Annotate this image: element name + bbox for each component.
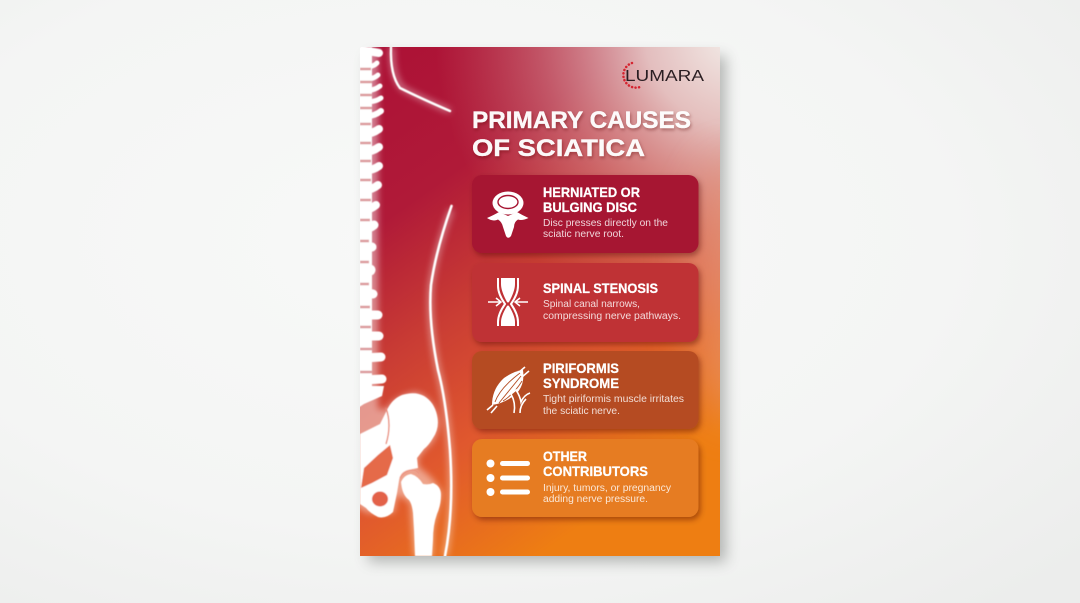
vertebral column <box>360 47 373 387</box>
card: piriformis syndrome: SYNDROME <box>543 375 619 391</box>
card: piriformis syndrome <box>472 351 698 429</box>
skeleton illustration <box>350 47 452 556</box>
spine <box>356 47 382 392</box>
title: OF SCIATICA <box>472 135 645 162</box>
card description: Tight piriformis muscle irritates <box>543 394 684 405</box>
back contour <box>430 206 452 556</box>
poster gradient background <box>360 47 720 556</box>
card heading: OTHER <box>543 448 587 464</box>
title: PRIMARY CAUSES <box>472 107 691 134</box>
icon: vertebra with disc <box>487 192 528 238</box>
card heading: PIRIFORMIS <box>543 360 619 376</box>
icon: narrowed spinal canal <box>488 278 528 326</box>
joint line <box>386 408 389 444</box>
card heading: SPINAL STENOSIS <box>543 280 658 296</box>
card: herniated or bulging disc: sciatic nerve root. <box>543 229 624 240</box>
card background <box>472 351 698 429</box>
poster <box>360 47 720 556</box>
spinous processes <box>362 50 382 380</box>
intervertebral gaps <box>360 69 372 372</box>
card background <box>472 439 698 517</box>
card description: Disc presses directly on the <box>543 218 669 229</box>
card description: Spinal canal narrows, <box>543 299 640 310</box>
card: other contributors: CONTRIBUTORS <box>543 463 648 479</box>
card: herniated or bulging disc: BULGING DISC <box>543 199 637 215</box>
femur <box>401 474 441 556</box>
pelvis <box>360 393 438 517</box>
card background <box>472 263 698 342</box>
card description: Injury, tumors, or pregnancy <box>543 483 671 494</box>
icon: list <box>486 460 530 496</box>
card background <box>472 175 698 253</box>
skeleton glow <box>350 47 451 556</box>
logo wordmark: LUMARA <box>625 68 705 85</box>
logo dotted arc <box>623 63 640 88</box>
card: piriformis syndrome: the sciatic nerve. <box>543 406 620 417</box>
card: spinal stenosis: compressing nerve pathways. <box>543 311 681 322</box>
neck contour <box>391 47 450 111</box>
title <box>472 107 691 162</box>
hip socket gap <box>400 470 416 478</box>
sacroiliac joint <box>361 445 393 488</box>
icon: piriformis muscle <box>487 367 530 413</box>
logo <box>623 63 705 88</box>
poster shadow <box>368 56 726 562</box>
card heading: HERNIATED OR <box>543 184 640 200</box>
card: other contributors: adding nerve pressure. <box>543 494 648 505</box>
lower lumbar vertebra <box>358 386 384 408</box>
card: other contributors <box>472 439 698 517</box>
card: spinal stenosis <box>472 263 698 342</box>
card: herniated or bulging disc <box>472 175 698 253</box>
obturator foramen <box>372 492 388 506</box>
